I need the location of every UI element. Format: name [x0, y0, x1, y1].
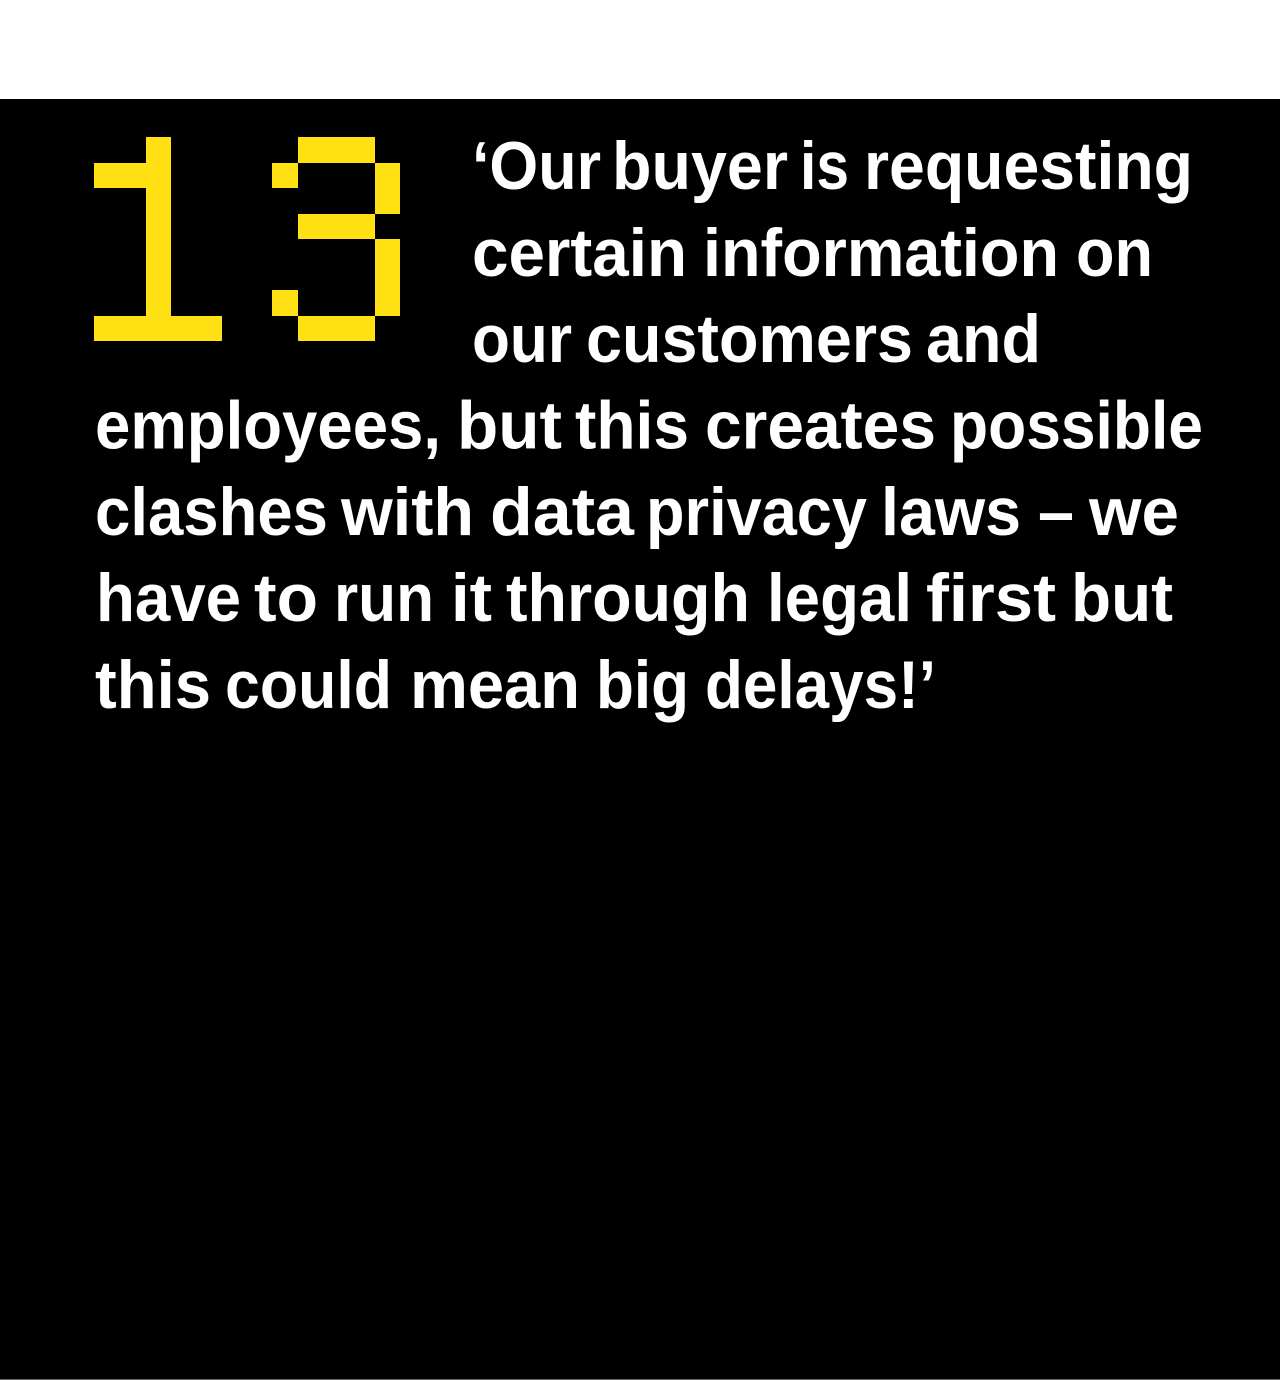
quote text: delays!’ — [705, 647, 936, 723]
quote text: certain — [472, 215, 687, 291]
quote text: big — [596, 647, 689, 723]
quote text: our — [472, 301, 572, 377]
quote text — [95, 128, 1203, 723]
quote text: is — [800, 128, 849, 204]
quote text: first — [926, 560, 1056, 636]
quote text: have — [96, 560, 241, 636]
pixel number 13 — [94, 137, 400, 341]
quote text: information — [703, 215, 1059, 291]
quote text: customers — [586, 301, 913, 377]
quote text: privacy — [646, 474, 867, 550]
quote text: this — [95, 647, 211, 723]
quote text: run — [334, 560, 434, 636]
quote text: possible — [950, 388, 1203, 464]
quote text: this — [575, 388, 689, 464]
quote text: laws — [881, 474, 1021, 550]
quote text: employees, — [95, 388, 441, 464]
quote text: requesting — [864, 128, 1193, 204]
quote text: legal — [767, 560, 912, 636]
quote text: could — [225, 647, 392, 723]
quote text: data — [490, 474, 635, 550]
quote text: creates — [705, 388, 936, 464]
quote text: ‘Our — [472, 128, 601, 204]
quote text: through — [506, 560, 750, 636]
quote text: it — [451, 560, 492, 636]
quote text: to — [254, 560, 318, 636]
quote text: but — [457, 388, 562, 464]
quote text: mean — [410, 647, 580, 723]
quote text: clashes — [95, 474, 328, 550]
quote text: with — [340, 474, 474, 550]
quote text: but — [1071, 560, 1173, 636]
quote text: we — [1088, 474, 1179, 550]
quote text: on — [1076, 215, 1153, 291]
quote text: – — [1038, 474, 1074, 550]
quote text: and — [926, 301, 1041, 377]
quote text: buyer — [612, 128, 788, 204]
